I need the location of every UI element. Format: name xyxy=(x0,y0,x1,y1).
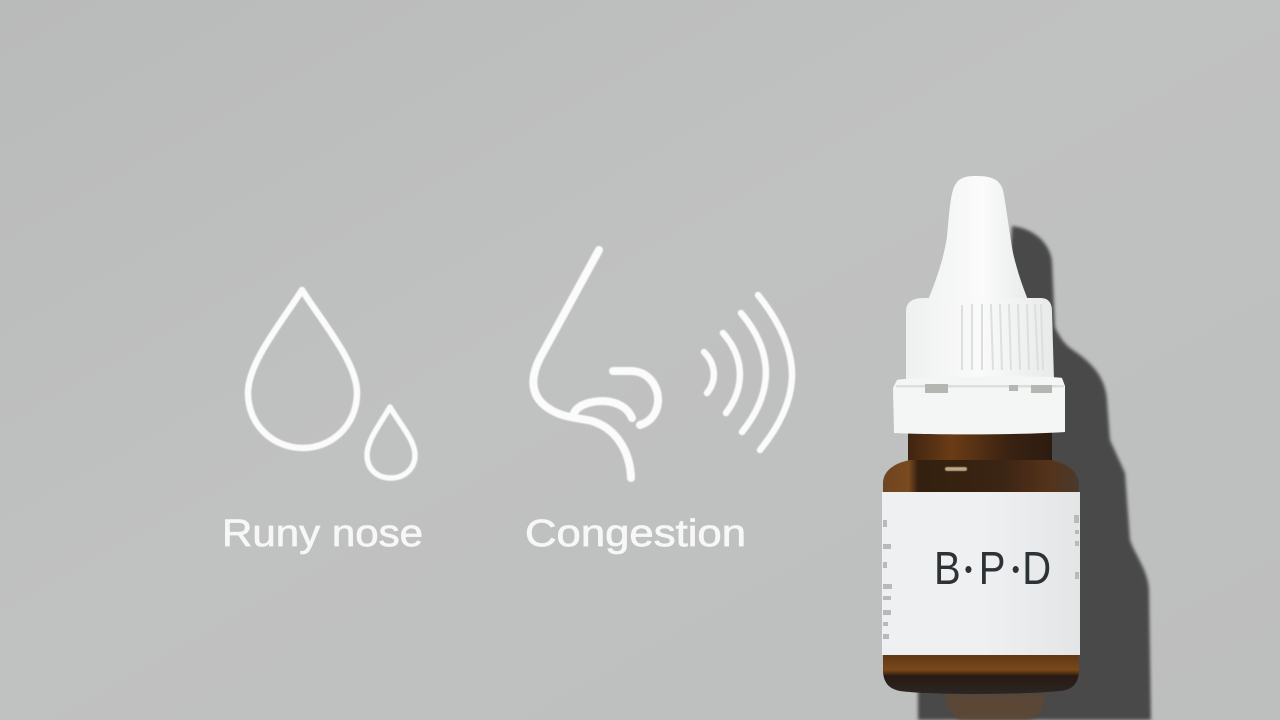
wave 3 xyxy=(741,313,766,432)
wave arcs xyxy=(704,295,792,450)
bottle shadow xyxy=(918,226,1151,720)
brand text: D xyxy=(1022,543,1051,595)
ribbed collar xyxy=(906,298,1054,380)
ring notches xyxy=(925,384,1052,393)
shoulder highlight xyxy=(945,467,967,471)
brand text: P xyxy=(979,543,1005,595)
glass shoulder xyxy=(883,460,1079,494)
icon: water drops xyxy=(248,290,415,478)
wave 4 xyxy=(758,295,792,450)
tamper ring xyxy=(893,377,1065,434)
icon: large drop xyxy=(248,290,357,448)
icon: nose with congestion waves xyxy=(533,250,792,478)
label: congestion: Congestion xyxy=(525,513,746,555)
dropper tip xyxy=(928,176,1028,300)
brand text: • xyxy=(1012,556,1020,584)
brand text: B xyxy=(934,543,961,595)
glass base xyxy=(883,654,1079,694)
outer nostril xyxy=(613,371,658,425)
wave 2 xyxy=(723,333,740,413)
brand text: • xyxy=(964,556,972,584)
ring gap line xyxy=(896,385,1064,388)
nose outline xyxy=(533,250,631,478)
label xyxy=(882,492,1080,655)
shadow amber glow xyxy=(945,694,1045,720)
bottle xyxy=(882,176,1080,694)
neck xyxy=(908,430,1052,462)
label edge microprint xyxy=(883,515,1079,639)
wave 1 xyxy=(704,352,714,393)
icon: small drop xyxy=(367,407,415,478)
collar ribs xyxy=(962,304,1043,370)
inner nostril xyxy=(574,401,632,418)
label: runny nose: Runy nose xyxy=(222,513,423,555)
